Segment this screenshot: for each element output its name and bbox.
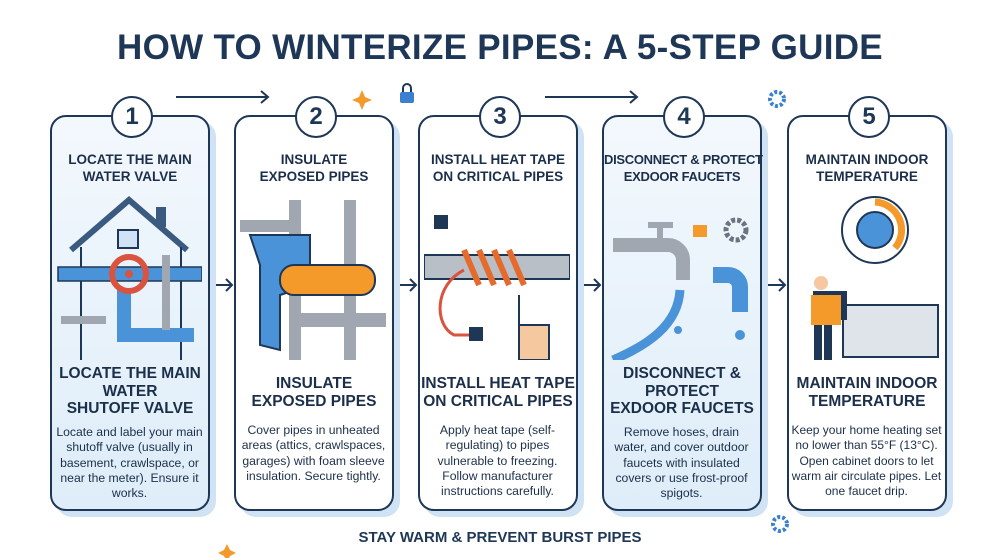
heading 5 (806, 152, 928, 184)
panel: step 3: 3 (493, 103, 507, 130)
heading 2: EXPOSED PIPES (260, 169, 368, 184)
heading 3b: INSTALL HEAT TAPE (421, 375, 575, 392)
icon: faucets (611, 218, 748, 360)
panel: step 2: 2 (309, 103, 323, 130)
text: step 5: Keep your home heating set no lower than 55°F (13°C). Open cabinet doors to let warm air circulate pipes. Let one faucet drip. (791, 423, 942, 498)
heading 1: LOCATE THE MAIN (68, 152, 192, 167)
heading 1: WATER VALVE (83, 169, 177, 184)
heading 1 (68, 152, 192, 184)
heading 1b: SHUTOFF VALVE (67, 400, 193, 417)
heading 4b: EXDOOR FAUCETS (610, 400, 754, 417)
text: step 4: Remove hoses, drain water, and cover outdoor faucets with insulated covers or use frost-proof spigots. (614, 425, 749, 500)
heading 3: ON CRITICAL PIPES (433, 169, 563, 184)
heading 5: MAINTAIN INDOOR (806, 152, 928, 167)
panel: step 4: 4 (677, 103, 691, 130)
heading 4b (610, 365, 754, 417)
text: step 3: Apply heat tape (self-regulating) to pipes vulnerable to freezing. Follow manufacturer instructions carefully. (438, 423, 557, 498)
text: step 2: Cover pipes in unheated areas (attics, crawlspaces, garages) with foam sleeve insulation. Secure tightly. (242, 423, 385, 483)
panel: step 3 (418, 115, 578, 511)
panel: step 5 (787, 115, 947, 511)
panel: step 1 (50, 115, 210, 511)
heading 2b (252, 375, 376, 410)
heading 1b: LOCATE THE MAIN (59, 365, 201, 382)
icon: heat tape (424, 215, 570, 360)
footer: STAY WARM & PREVENT BURST PIPES (358, 529, 642, 546)
heading 1b (59, 365, 201, 417)
heading 2b: EXPOSED PIPES (252, 392, 376, 410)
icon: house with valve (57, 196, 202, 360)
heading 3b (421, 375, 575, 410)
panel: step 1: 1 (125, 103, 139, 130)
icon: thermostat and sink (811, 196, 939, 360)
icon: pipe insulation (240, 200, 386, 360)
panel: step 4 (602, 115, 762, 511)
panel: step 5: 5 (862, 103, 876, 130)
heading 5b: MAINTAIN INDOOR (797, 375, 937, 392)
heading 3 (431, 152, 565, 184)
heading 2 (260, 152, 368, 184)
heading 5b: TEMPERATURE (809, 392, 925, 410)
heading 5: TEMPERATURE (816, 169, 918, 184)
heading 4b: DISCONNECT & (623, 365, 741, 382)
panel: step 2 (234, 115, 394, 511)
title: HOW TO WINTERIZE PIPES: A 5-STEP GUIDE (117, 28, 883, 67)
heading 3: INSTALL HEAT TAPE (431, 152, 565, 167)
heading 2: INSULATE (281, 152, 347, 167)
heading 4: EXDOOR FAUCETS (624, 169, 740, 184)
heading 4 (604, 152, 763, 184)
heading 1b: WATER (103, 382, 157, 400)
heading 4b: PROTECT (645, 382, 719, 400)
text: step 1: Locate and label your main shutoff valve (usually in basement, crawlspace, or near the meter). Ensure it works. (56, 425, 203, 500)
heading 2b: INSULATE (276, 375, 352, 392)
heading 3b: ON CRITICAL PIPES (423, 392, 573, 410)
heading 5b (797, 375, 937, 410)
heading 4: DISCONNECT & PROTECT (604, 152, 763, 167)
